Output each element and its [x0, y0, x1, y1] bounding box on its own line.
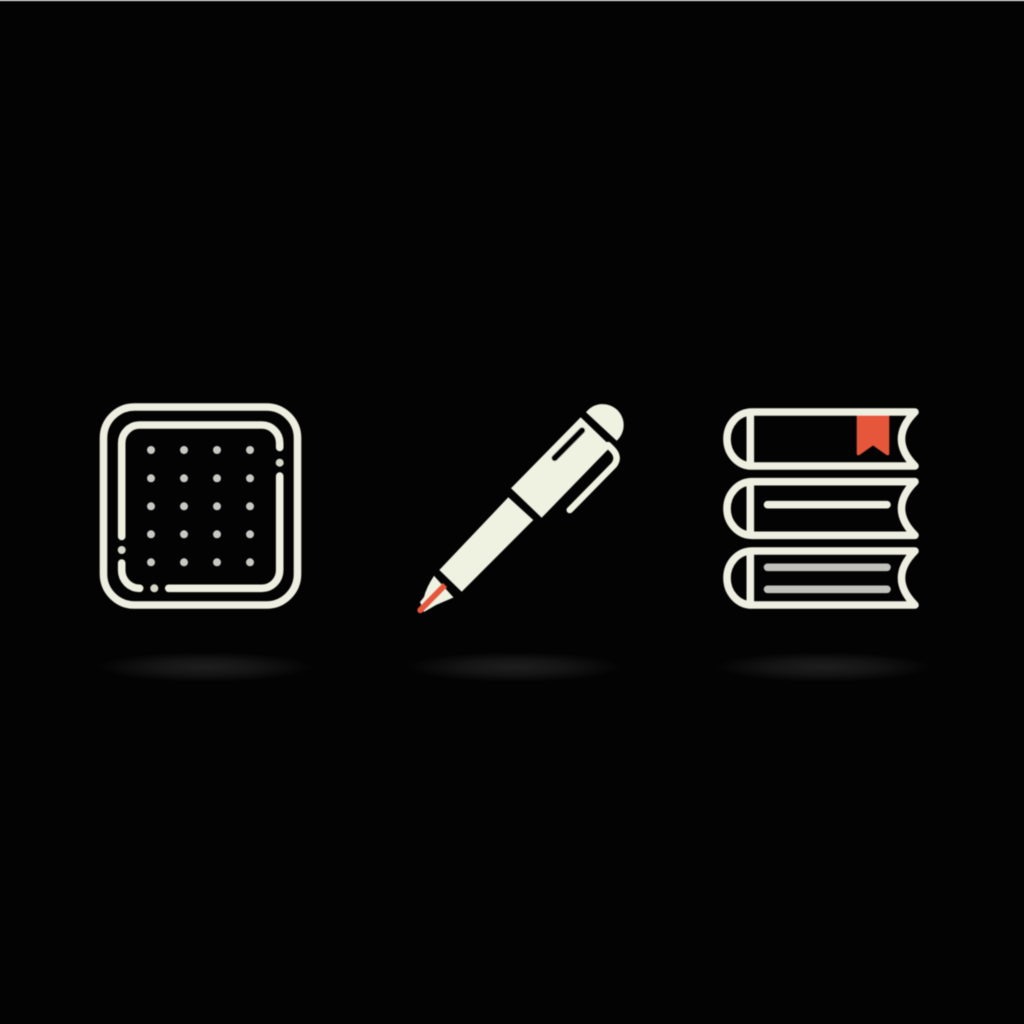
inner frame right segment [169, 476, 280, 588]
pen red ink line [417, 585, 445, 613]
pen upper barrel [511, 417, 611, 518]
icon: stack of books [727, 412, 915, 605]
dot grid [147, 446, 254, 566]
pen window slot [555, 430, 582, 458]
shadow: left icon [97, 652, 313, 682]
top book [727, 412, 915, 466]
bookmark [857, 416, 889, 455]
pen lower barrel [439, 497, 533, 592]
pen clip [570, 445, 617, 510]
shadow: centre icon [406, 652, 622, 682]
icon: pen [417, 404, 624, 613]
inner frame top segment [122, 425, 280, 536]
shadow: right icon [715, 652, 931, 682]
outer frame [104, 407, 298, 605]
inner frame corner segment [122, 563, 140, 588]
icon: dotted square pad [104, 407, 298, 605]
pen nib [420, 576, 454, 612]
pen cap top [586, 404, 624, 441]
bottom book [727, 551, 915, 605]
grey text lines [768, 567, 887, 589]
frame gap dots [118, 459, 284, 592]
middle book [727, 482, 915, 535]
title line [768, 501, 887, 509]
